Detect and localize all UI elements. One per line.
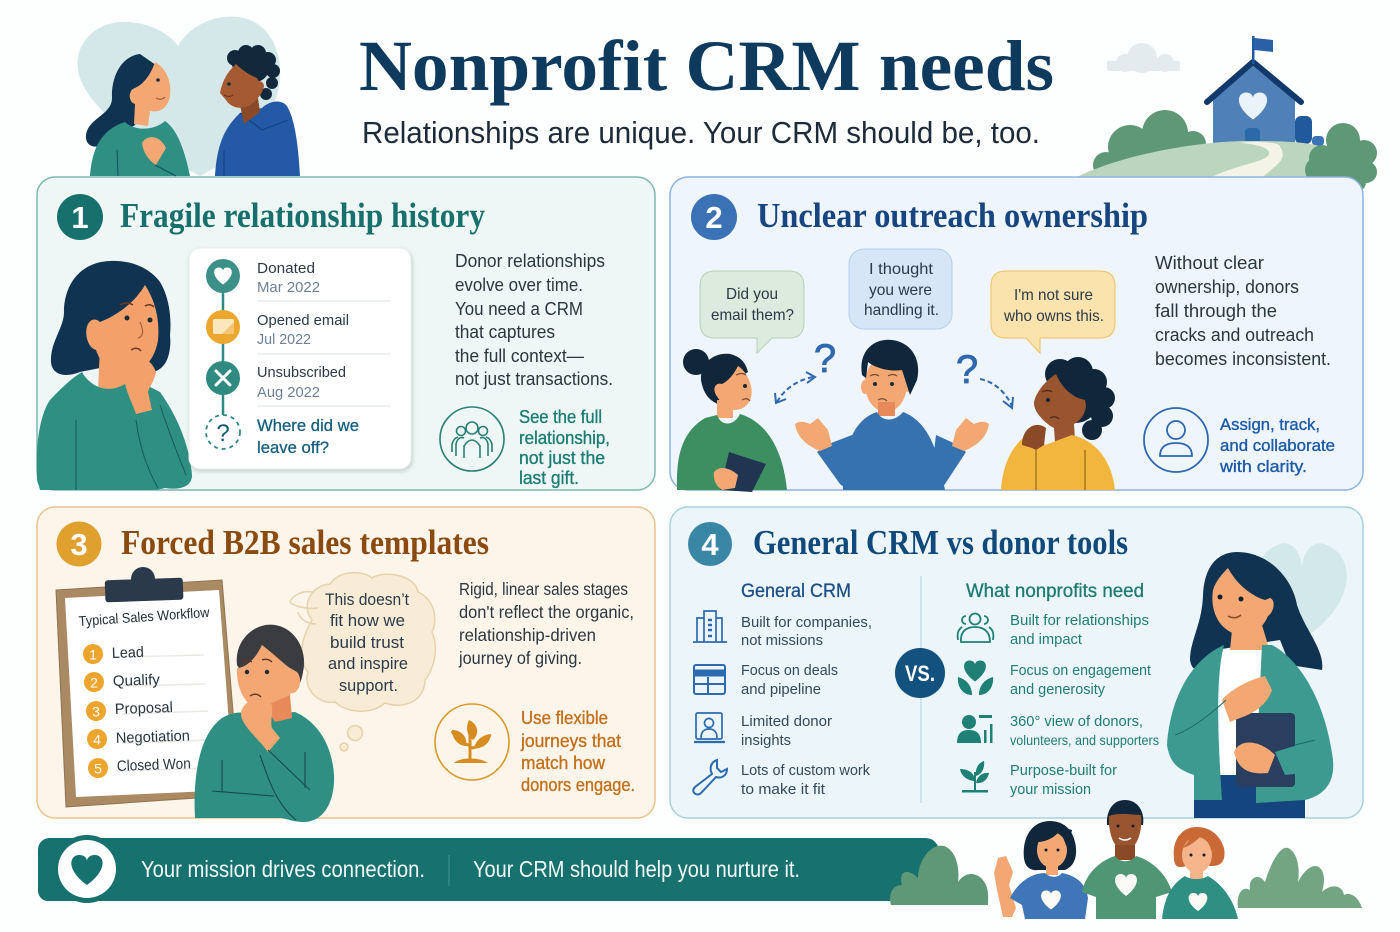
clipboard: typical sales workflow: Typical Sales Workflow bbox=[78, 604, 211, 629]
workflow steps: Qualify bbox=[113, 671, 161, 690]
panel 1 body text: Donor relationships bbox=[455, 251, 605, 271]
illustration: three volunteers bbox=[994, 800, 1238, 919]
panel 1 body text: not just transactions. bbox=[455, 369, 613, 389]
row: limited donor insights: Limited donor bbox=[741, 713, 832, 730]
clipboard: typical sales workflow bbox=[56, 567, 240, 807]
panel 3 body text: Rigid, linear sales stages bbox=[459, 579, 628, 599]
row: built for companies: not missions bbox=[741, 632, 823, 649]
illustration: shrugging man bbox=[795, 340, 989, 490]
icon: sprout bbox=[435, 704, 509, 780]
row: built for companies bbox=[741, 614, 872, 649]
icon: email bbox=[206, 310, 240, 344]
timeline entries: Aug 2022 bbox=[257, 384, 320, 401]
row: 360 view: volunteers, and supporters bbox=[1010, 732, 1159, 748]
icon: building bbox=[693, 611, 727, 642]
timeline entries: Unsubscribed bbox=[257, 364, 346, 381]
workflow steps: Lead bbox=[112, 644, 144, 662]
heading 2: Unclear outreach ownership bbox=[757, 196, 1148, 235]
volunteer right bbox=[1162, 827, 1238, 919]
panel 3 body text bbox=[458, 579, 634, 668]
illustration: two people in front of a heart bbox=[78, 17, 300, 176]
row: focus on deals bbox=[741, 662, 838, 698]
row: focus on deals: Focus on deals bbox=[741, 662, 838, 679]
heading 1: Fragile relationship history bbox=[120, 196, 485, 235]
speech bubble: not sure who owns this: I'm not sure bbox=[1014, 287, 1093, 304]
row: limited donor insights bbox=[741, 713, 832, 749]
panel 2: unclear outreach ownership bbox=[670, 177, 1363, 492]
thought bubble text: build trust bbox=[330, 633, 404, 652]
workflow steps: 2 bbox=[90, 674, 98, 690]
panel 2 body text: fall through the bbox=[1155, 301, 1277, 321]
workflow steps: 5 bbox=[94, 760, 102, 776]
row: focus on deals: and pipeline bbox=[741, 681, 821, 698]
callout 3: journeys that bbox=[520, 731, 621, 751]
thought bubble text bbox=[325, 590, 409, 695]
number badge 3 bbox=[56, 522, 102, 566]
timeline entries: Mar 2022 bbox=[257, 279, 320, 296]
speech bubble: i thought you were handling it: you were bbox=[869, 282, 932, 299]
banner: Your CRM should help you nurture it. bbox=[473, 856, 800, 882]
panel 3 body text: journey of giving. bbox=[458, 648, 582, 668]
illustration: worried woman bbox=[37, 261, 192, 490]
icon: question bbox=[206, 415, 240, 449]
question marks and arrows: ? bbox=[956, 348, 978, 392]
timeline entries: Donated bbox=[257, 260, 315, 277]
volunteer center bbox=[1082, 800, 1172, 919]
column: what nonprofits need: What nonprofits need bbox=[966, 581, 1144, 602]
row: purpose-built bbox=[1010, 762, 1117, 798]
icon: wrench bbox=[693, 760, 727, 794]
callout 3: Use flexible bbox=[521, 708, 608, 728]
illustration: tree at panel corner bbox=[1305, 123, 1377, 192]
callout 2 bbox=[1219, 415, 1335, 476]
callout 1: See the full bbox=[519, 407, 602, 427]
banner bbox=[38, 835, 942, 903]
thought bubble text: fit how we bbox=[330, 611, 405, 630]
row: purpose-built: your mission bbox=[1010, 781, 1091, 798]
callout 3 bbox=[520, 708, 635, 795]
timeline card bbox=[189, 248, 411, 469]
panel 3 body text: don't reflect the organic, bbox=[459, 602, 634, 622]
workflow steps bbox=[83, 644, 191, 778]
speech bubble: i thought you were handling it: handling it. bbox=[864, 302, 939, 319]
workflow steps: 1 bbox=[89, 646, 97, 662]
number badge 4 bbox=[688, 522, 732, 566]
workflow steps: Closed Won bbox=[117, 755, 191, 775]
timeline entries bbox=[257, 260, 359, 457]
row: lots of custom work: to make it fit bbox=[741, 781, 826, 798]
panel 1 body text: You need a CRM bbox=[455, 299, 583, 319]
illustration: left bush bbox=[890, 846, 988, 905]
number badge 4: 4 bbox=[701, 527, 719, 562]
callout 1: last gift. bbox=[519, 468, 579, 488]
illustration: woman holding tablet bbox=[1167, 543, 1347, 818]
speech bubble: not sure who owns this bbox=[991, 271, 1115, 353]
subtitle: Relationships are unique. Your CRM should be, too. bbox=[362, 115, 1040, 150]
timeline entries: Jul 2022 bbox=[257, 331, 311, 348]
column divider and VS badge: VS. bbox=[905, 661, 935, 686]
row: built for relationships: and impact bbox=[1010, 631, 1083, 648]
icon: heart in hands bbox=[958, 660, 993, 695]
row: limited donor insights: insights bbox=[741, 732, 791, 749]
icon: people bbox=[958, 614, 993, 642]
row: focus on engagement: and generosity bbox=[1010, 681, 1105, 698]
heading 3: Forced B2B sales templates bbox=[121, 523, 489, 562]
column: general CRM bbox=[693, 581, 872, 798]
panel 2 body text bbox=[1155, 253, 1331, 369]
icon: x mark bbox=[206, 361, 240, 395]
speech bubble: did you email them: email them? bbox=[711, 307, 794, 324]
number badge 3: 3 bbox=[70, 527, 88, 562]
callout 1: not just the bbox=[519, 448, 605, 468]
thought bubble text: This doesn’t bbox=[325, 590, 409, 609]
panel 2 body text: becomes inconsistent. bbox=[1155, 349, 1331, 369]
row: focus on engagement: Focus on engagement bbox=[1010, 662, 1152, 679]
number badge 2: 2 bbox=[705, 200, 723, 235]
speech bubble: did you email them: Did you bbox=[726, 286, 778, 303]
thought bubble text: and inspire bbox=[328, 654, 408, 673]
icon: person with bars bbox=[957, 715, 992, 743]
panel 2 body text: ownership, donors bbox=[1155, 277, 1299, 297]
row: purpose-built: Purpose-built for bbox=[1010, 762, 1117, 779]
workflow steps: 4 bbox=[93, 732, 101, 748]
speech bubble: did you email them bbox=[700, 271, 804, 353]
callout 3: match how bbox=[521, 753, 606, 773]
row: built for relationships bbox=[1010, 612, 1149, 648]
workflow steps: Negotiation bbox=[116, 727, 190, 747]
speech bubble: i thought you were handling it: I thought bbox=[869, 261, 934, 278]
callout 2: with clarity. bbox=[1219, 457, 1307, 476]
row: focus on engagement bbox=[1010, 662, 1152, 698]
timeline entries: leave off? bbox=[257, 438, 329, 457]
workflow steps: Proposal bbox=[115, 699, 173, 718]
illustration: woman with tablet bbox=[677, 349, 787, 492]
row: built for companies: Built for companies, bbox=[741, 614, 872, 631]
panel 2 body text: Without clear bbox=[1155, 253, 1264, 273]
icon: question: ? bbox=[216, 420, 230, 447]
panel 4: general CRM vs donor tools bbox=[670, 507, 1363, 818]
row: 360 view: 360° view of donors, bbox=[1010, 713, 1143, 730]
icon: plant bbox=[960, 761, 989, 792]
speech bubble: not sure who owns this: who owns this. bbox=[1003, 308, 1104, 325]
panel 1 body text: evolve over time. bbox=[455, 275, 583, 295]
title: Nonprofit CRM needs bbox=[359, 26, 1054, 106]
panel 3: forced B2B sales templates bbox=[37, 507, 655, 822]
panel 1 body text: that captures bbox=[455, 322, 555, 342]
callout 1: relationship, bbox=[519, 428, 610, 448]
callout 3: donors engage. bbox=[521, 775, 635, 795]
number badge 2 bbox=[691, 194, 737, 240]
question marks and arrows bbox=[775, 337, 1013, 408]
timeline entries: Opened email bbox=[257, 312, 349, 329]
panel 1 body text bbox=[455, 251, 613, 389]
number badge 1: 1 bbox=[71, 200, 89, 235]
panel 2 body text: cracks and outreach bbox=[1155, 325, 1314, 345]
column divider and VS badge bbox=[895, 576, 945, 803]
column: general CRM: General CRM bbox=[741, 581, 851, 602]
illustration: community house on a hill bbox=[1075, 36, 1325, 178]
row: built for relationships: Built for relationships bbox=[1010, 612, 1149, 629]
illustration: thoughtful woman in yellow bbox=[1001, 357, 1115, 490]
callout 2: Assign, track, bbox=[1220, 415, 1320, 434]
thought bubble text: support. bbox=[339, 676, 398, 695]
icon: group of people bbox=[440, 407, 504, 471]
speech bubble: i thought you were handling it bbox=[849, 249, 952, 329]
callout 1 bbox=[519, 407, 610, 488]
illustration: cloud bbox=[1107, 43, 1180, 73]
icon: heart bbox=[206, 259, 240, 293]
number badge 1 bbox=[57, 194, 103, 240]
heading 4: General CRM vs donor tools bbox=[753, 523, 1128, 562]
icon: person bbox=[1144, 408, 1208, 472]
row: lots of custom work: Lots of custom work bbox=[741, 762, 870, 779]
icon: table bbox=[694, 665, 725, 694]
workflow steps: 3 bbox=[92, 704, 100, 720]
illustration: right bush bbox=[1238, 848, 1362, 908]
timeline entries: Where did we bbox=[257, 416, 359, 435]
volunteer left bbox=[994, 821, 1088, 919]
callout 2: and collaborate bbox=[1220, 436, 1335, 455]
row: lots of custom work bbox=[741, 762, 870, 798]
thought bubble bbox=[290, 573, 435, 751]
panel 1: fragile relationship history bbox=[37, 177, 655, 490]
icon: donor profile bbox=[694, 713, 725, 742]
column: what nonprofits need bbox=[957, 581, 1159, 798]
row: 360 view bbox=[1010, 713, 1159, 748]
banner: Your mission drives connection. bbox=[141, 856, 425, 882]
question marks and arrows: ? bbox=[814, 337, 836, 381]
panel 3 body text: relationship-driven bbox=[459, 625, 596, 645]
illustration: thinking man bbox=[195, 625, 334, 822]
panel 1 body text: the full context— bbox=[455, 346, 584, 366]
